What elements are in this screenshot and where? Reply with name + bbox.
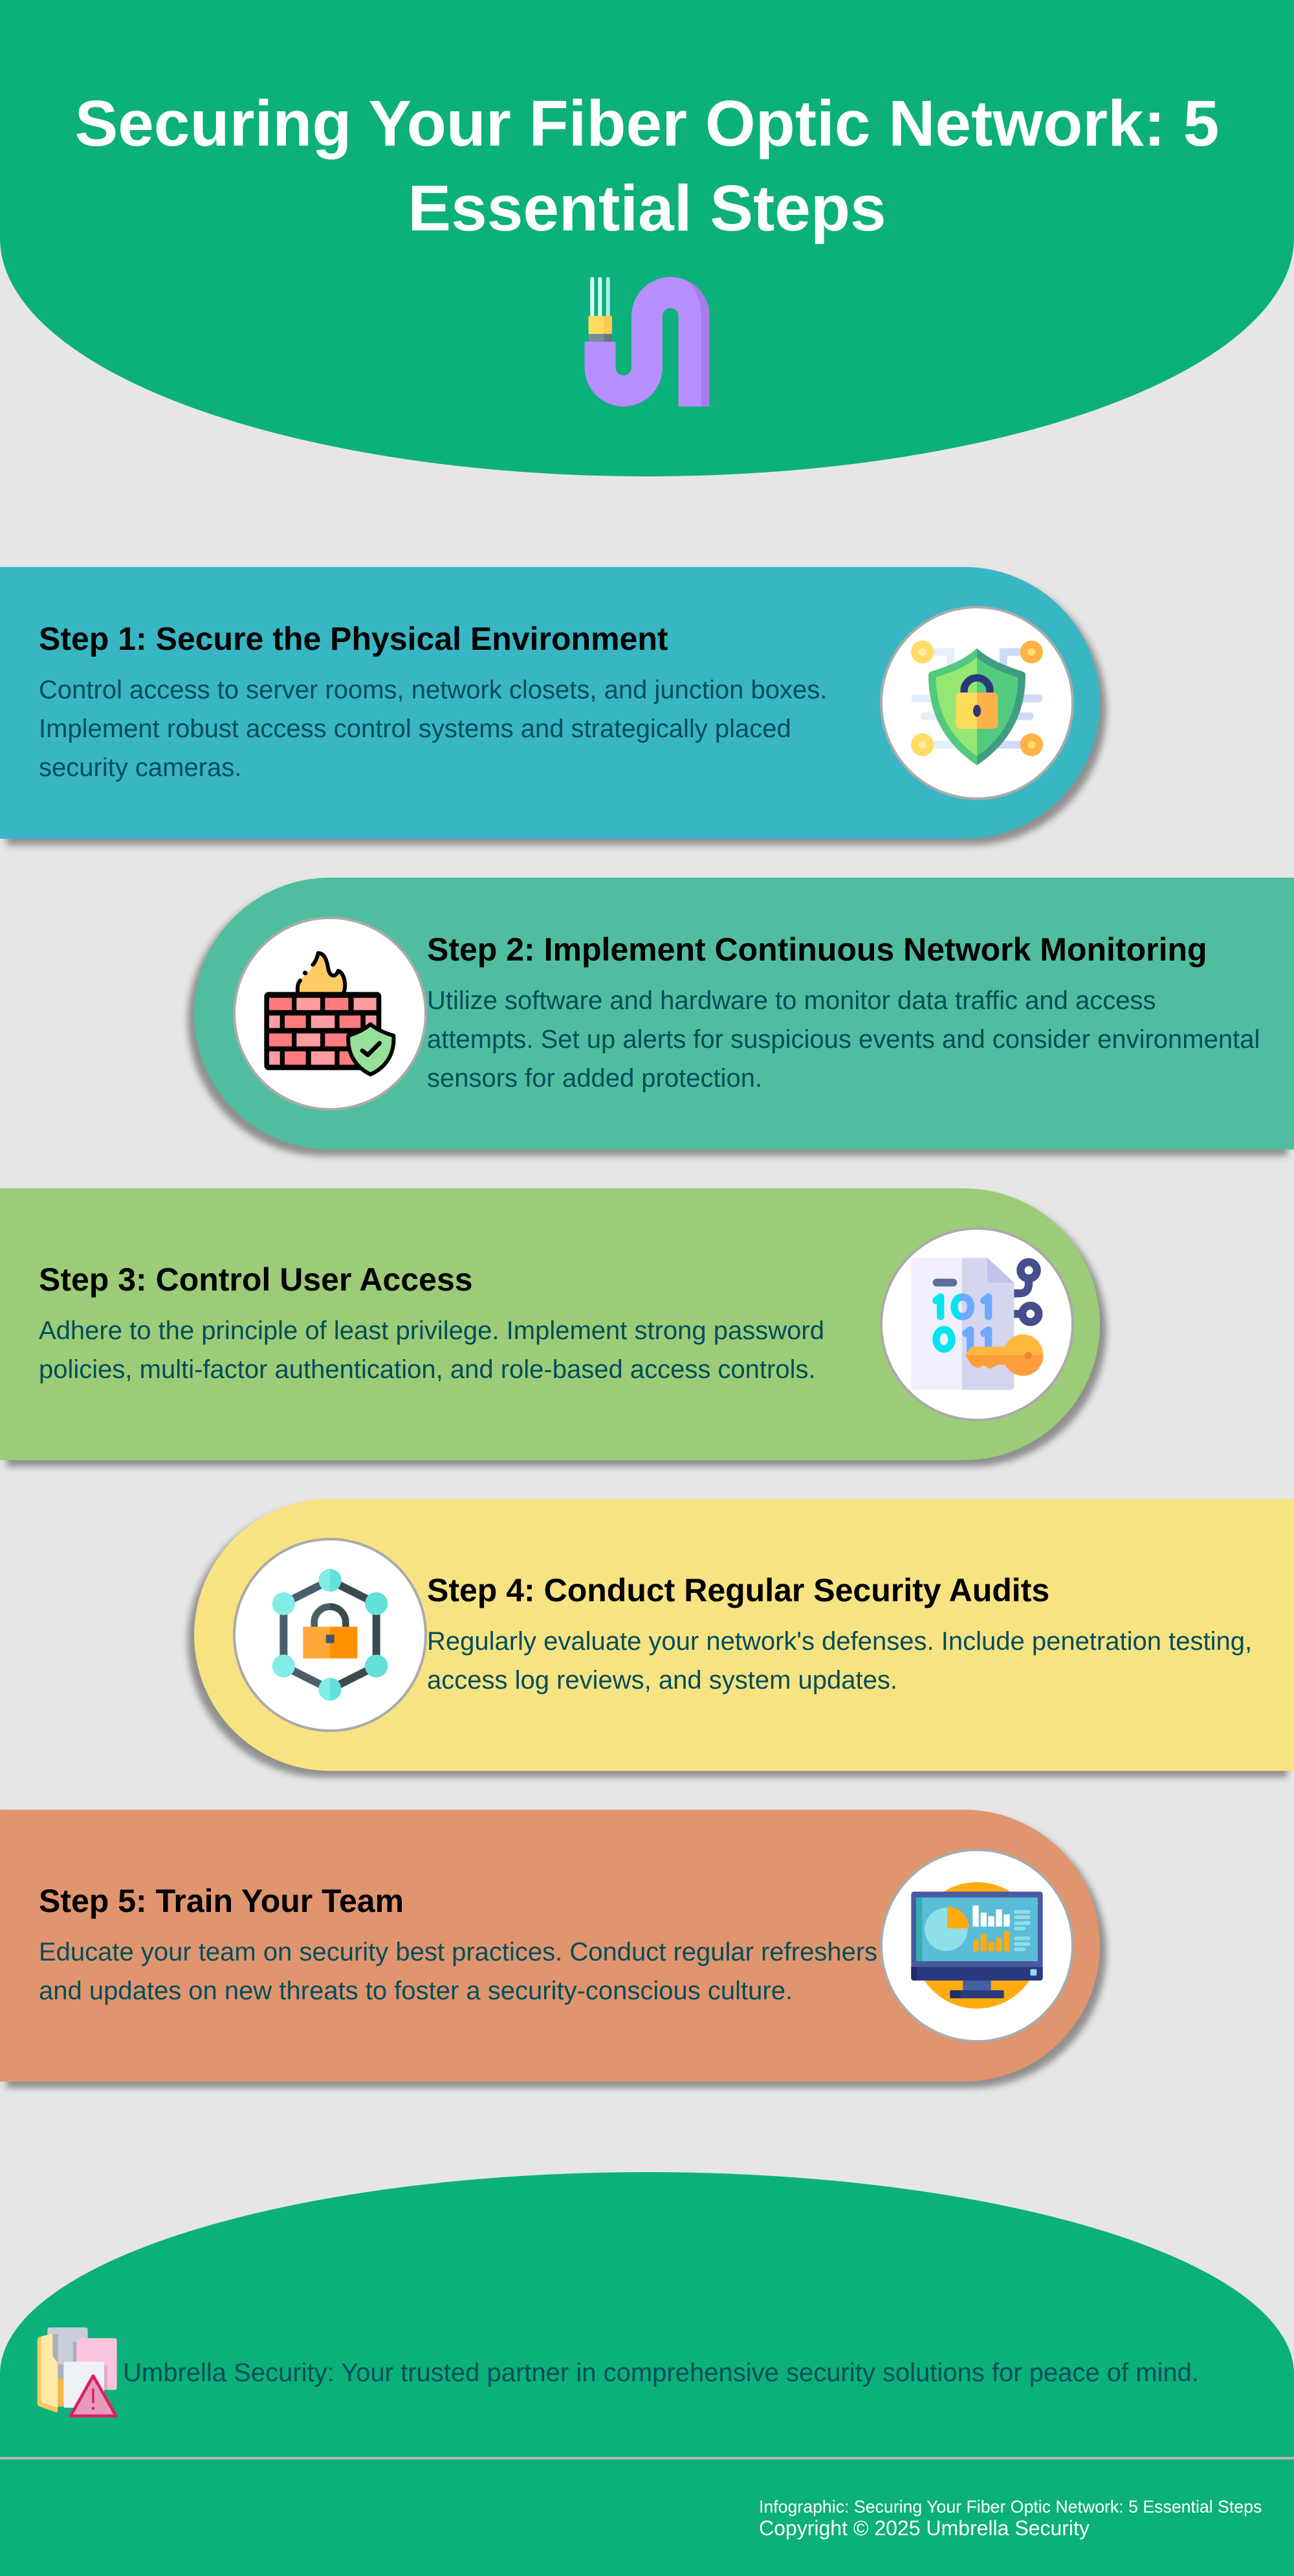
step 3 text <box>39 1316 824 1384</box>
header banner <box>0 0 1294 476</box>
footer credit <box>759 2497 1262 2540</box>
panel: step 4 <box>194 1499 1294 1771</box>
step 1 text: security cameras. <box>39 753 241 782</box>
step 1 text: Implement robust access control systems and strategically placed <box>39 715 791 743</box>
step 4 text <box>427 1627 1252 1694</box>
step 5 heading: Step 5: Train Your Team <box>39 1883 404 1919</box>
infographic title line: Infographic: Securing Your Fiber Optic Network: 5 Essential Steps <box>759 2497 1262 2516</box>
icon: fiber optic cable <box>585 277 709 406</box>
title: Securing Your Fiber Optic Network: 5 <box>75 87 1219 160</box>
icon: monitor dashboard <box>880 1849 1074 2043</box>
footer divider <box>0 2457 1294 2459</box>
step 1 heading: Step 1: Secure the Physical Environment <box>39 621 668 657</box>
title <box>75 87 1219 245</box>
step 2 text: Utilize software and hardware to monitor data traffic and access <box>427 986 1156 1015</box>
step 2 text: sensors for added protection. <box>427 1064 762 1093</box>
step 4 text: Regularly evaluate your network's defenses. Include penetration testing, <box>427 1627 1252 1656</box>
step 4 text: access log reviews, and system updates. <box>427 1666 897 1694</box>
step 1 text <box>39 676 827 782</box>
panel: step 2 <box>194 878 1294 1149</box>
copyright line: Copyright © 2025 Umbrella Security <box>759 2516 1090 2540</box>
panel: step 3 <box>0 1188 1100 1460</box>
title: Essential Steps <box>408 172 886 245</box>
step 3 heading: Step 3: Control User Access <box>39 1261 473 1298</box>
footer tagline: Umbrella Security: Your trusted partner in comprehensive security solutions for peace of mind. <box>123 2359 1199 2387</box>
icon: network hexagon with padlock <box>233 1538 427 1732</box>
icon: binary document and key <box>880 1227 1074 1421</box>
step 5 text: Educate your team on security best practices. Conduct regular refreshers <box>39 1938 877 1966</box>
icon: shield with padlock <box>880 606 1074 800</box>
step 1 text: Control access to server rooms, network closets, and junction boxes. <box>39 676 827 704</box>
footer banner <box>0 2172 1294 2576</box>
icon: folder with warning triangle <box>38 2327 118 2417</box>
step 4 heading: Step 4: Conduct Regular Security Audits <box>427 1572 1049 1608</box>
panel: step 5 <box>0 1810 1100 2082</box>
panel: step 1 <box>0 567 1100 839</box>
step 2 text: attempts. Set up alerts for suspicious events and consider environmental <box>427 1025 1260 1054</box>
icon: firewall with shield <box>233 916 427 1111</box>
step 3 text: policies, multi-factor authentication, and role-based access controls. <box>39 1355 816 1384</box>
step 2 heading: Step 2: Implement Continuous Network Monitoring <box>427 931 1207 968</box>
step 5 text <box>39 1938 877 2005</box>
step 2 text <box>427 986 1260 1093</box>
step 5 text: and updates on new threats to foster a security-conscious culture. <box>39 1977 793 2005</box>
step 3 text: Adhere to the principle of least privilege. Implement strong password <box>39 1316 824 1345</box>
